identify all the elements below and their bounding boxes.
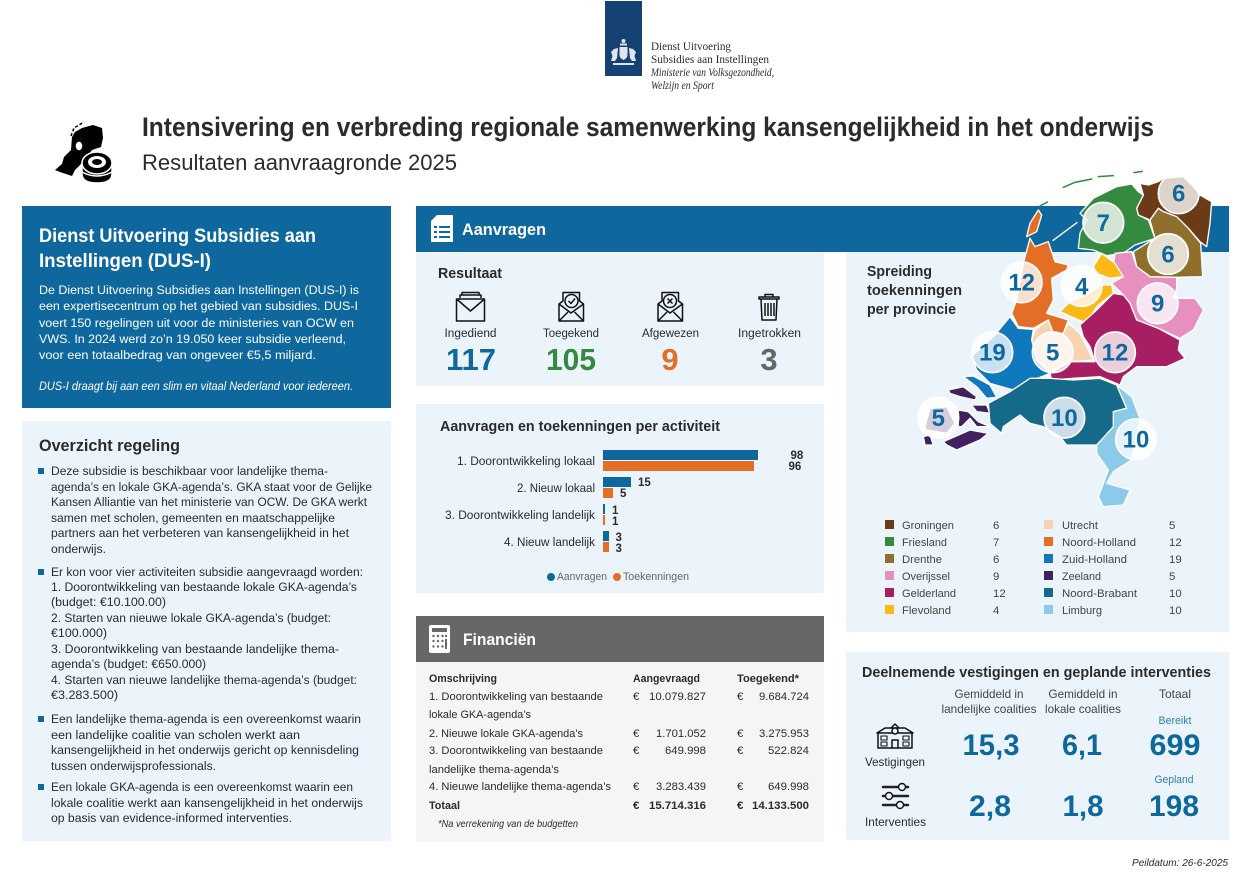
heading: Spreiding [867,264,962,318]
legend: provinces: Zeeland [1062,571,1101,583]
heading: Overzicht regeling: Overzicht regeling [39,436,180,455]
column headers: Gemiddeld in [1048,687,1118,701]
legend: activity chart [547,571,689,583]
table: budgets: € [633,800,640,812]
heading: Aanvragen: Aanvragen [462,220,546,239]
bar chart: activities: 4. Nieuw landelijk [504,535,596,549]
bubble values: 6 [1161,241,1175,268]
table: budgets: 15.714.316 [649,800,706,812]
footnote: budgets: *Na verrekening van de budgetten [438,818,578,830]
bubble values: 19 [979,340,1006,367]
legend: provinces: 12 [993,588,1006,600]
logo: Rijksoverheid [605,1,774,92]
panel: Spreiding toekenningen per provincie [846,171,1229,632]
text block: bullet 1: Deze subsidie is beschikbaar voor landelijke thema- [51,464,328,478]
province: Overijssel [1112,252,1203,338]
bar chart: activities: 1 [612,516,619,528]
legend: provinces: Zuid-Holland [1062,554,1127,566]
legend: provinces: Overijssel [902,571,950,583]
legend: provinces: 19 [1169,554,1182,566]
footnote: date: Peildatum: 26-6-2025 [1132,857,1228,869]
logo wordmark: Dienst Uitvoering [651,40,731,53]
province: Noord-Brabant [988,378,1127,445]
bubble values: 7 [1097,210,1110,237]
text block: bullet 1: Kansen Alliantie van het ministerie van OCW. De GKA werkt [51,495,368,509]
text block: bullet 4: lokale coalitie werkt aan kansengelijkheid in het onderwijs [51,796,363,810]
metric: Afgewezen: Afgewezen [642,326,699,340]
province: Drenthe [1133,208,1203,277]
table: budgets: € [737,691,744,703]
metric: Toegekend: 105 [546,342,596,377]
bar chart: activities: 3 [616,532,622,544]
legend: provinces: 9 [993,571,999,583]
logo wordmark: Ministerie van Volksgezondheid, [650,66,774,79]
column headers [942,687,1191,716]
table: budgets: Aangevraagd [633,673,700,685]
table: budgets: 14.133.500 [752,800,809,812]
table: budgets: 9.684.724 [759,691,809,703]
table: budgets: 10.079.827 [649,691,706,703]
bubble values: 4 [1075,273,1089,300]
panel: Deelnemende vestigingen en geplande interventies [846,652,1229,840]
bubble values [932,181,1185,454]
logo wordmark: Subsidies aan Instellingen [651,53,769,66]
province: Utrecht [1032,320,1093,372]
table: budgets: 649.998 [768,781,809,793]
heading: DUS-I [39,225,316,272]
table: budgets: 3.283.439 [656,781,706,793]
bubble values: 12 [1102,340,1128,367]
table: budgets: € [633,691,640,703]
metric: Ingetrokken: 3 [760,342,778,377]
metric: Ingediend: Ingediend [444,326,497,340]
bubble values: 12 [1008,270,1035,297]
row: Interventies: Gepland [1154,774,1194,786]
table: budgets: landelijke thema-agenda’s [429,764,559,776]
table: budgets: € [737,728,744,740]
bubble values: 5 [1046,340,1059,367]
text block: bullet 1: samen met scholen, gemeenten en maatschappelijke [51,511,335,525]
heading: Spreiding: per provincie [867,302,956,318]
table: budgets: 4. Nieuwe landelijke thema-agenda’s [429,781,611,793]
bubble values: 6 [1172,181,1185,208]
text block: bullet 3: een landelijke coalitie van scholen werkt aan [51,728,300,742]
legend: provinces: 5 [1169,520,1175,532]
row: Interventies: Interventies [865,815,926,829]
heading: DUS-I: Instellingen (DUS-I) [39,250,211,272]
table: budgets: Totaal [429,800,460,812]
bar chart: activities: 2. Nieuw lokaal [517,481,595,495]
metric: Afgewezen: 9 [661,342,679,377]
panel: Financiën [416,616,824,842]
map: provinces of the Netherlands [918,171,1212,507]
table: budgets: 3.275.953 [759,728,809,740]
legend: provinces [885,520,1182,617]
province: Zeeland [923,387,990,450]
table: budgets: € [737,745,744,757]
column headers: Gemiddeld in [954,687,1024,701]
column headers: landelijke coalities [942,702,1036,716]
icon: Netherlands with coins [55,122,112,183]
bubble values: 9 [1151,291,1164,318]
row: Interventies: 198 [1149,790,1199,823]
legend: provinces: Friesland [902,537,947,549]
bar chart: activities: 15 [638,477,651,489]
table: budgets: € [633,745,640,757]
heading: Resultaat: Resultaat [438,265,502,282]
province: Flevoland [1060,253,1123,323]
text block: DUS-I intro: een expertisecentrum op het gebied van subsidies. DUS-I [39,299,358,313]
province: Noord-Holland [1012,210,1068,333]
table: budgets: € [737,781,744,793]
province: Limburg [1097,385,1140,507]
table: budgets: 522.824 [768,745,809,757]
province: Zuid-Holland [963,317,1050,398]
bar chart: activities: 3. Doorontwikkeling landelijk [445,508,596,522]
legend: provinces: 6 [993,554,999,566]
bar chart: activities [445,450,804,555]
bar chart: activities: 1 [612,505,619,517]
legend: provinces: 10 [1169,588,1182,600]
metric: Toegekend: Toegekend [543,326,599,340]
text block: bullet 1: onderwijs. [51,542,106,556]
legend: provinces: 5 [1169,571,1175,583]
heading: Spreiding: Spreiding [867,264,932,280]
text block: bullet 3: kansengelijkheid in het onderwijs gericht op kennisdeling [51,743,359,757]
table: budgets: 649.998 [665,745,706,757]
text block: bullet 3: Een landelijke thema-agenda is een overeenkomst waarin [51,712,361,726]
table: budgets: Omschrijving [429,673,497,685]
legend: provinces: Utrecht [1062,520,1099,532]
icon: document [431,215,453,242]
text block: bullet 3: tussen onderwijsprofessionals. [51,759,216,773]
row: Interventies: 1,8 [1062,790,1104,823]
text block: bullet 4: Een lokale GKA-agenda is een overeenkomst waarin een [51,780,353,794]
legend: activity chart: Toekenningen [623,571,689,583]
text block: DUS-I intro [39,283,359,393]
legend: provinces: 4 [993,605,999,617]
legend: provinces: 10 [1169,605,1182,617]
row: Vestigingen: Vestigingen [865,755,925,769]
text block: DUS-I intro: De Dienst Uitvoering Subsidies aan Instellingen (DUS-I) is [39,283,359,297]
legend: provinces: Noord-Holland [1062,537,1136,549]
text block: bullet 2 [38,565,363,702]
heading: Spreiding: toekenningen [867,283,962,299]
heading: DUS-I: Dienst Uitvoering Subsidies aan [39,225,316,247]
metric: Toegekend [543,292,599,377]
bubble values: 5 [932,405,945,432]
table: budgets: Toegekend* [737,673,800,685]
text block: bullet 1: agenda’s en lokale GKA-agenda’s. GKA staat voor de Gelijke [51,480,372,494]
legend: provinces: Gelderland [902,588,956,600]
legend: activity chart: Aanvragen [557,571,607,583]
text block: bullet 4 [38,780,363,825]
bar chart: activities: 5 [620,488,627,500]
bar chart: activities: 3 [616,543,622,555]
text block: bullet 2: agenda’s (budget: €650.000) [51,657,206,671]
row: Vestigingen: Bereikt [1158,715,1192,727]
logo wordmark: Welzijn en Sport [651,79,715,92]
icon: sliders [883,784,908,808]
text block: bullet 2: 2. Starten van nieuwe lokale GKA-agenda’s (budget: [51,611,331,625]
province: Groningen [1137,177,1212,247]
column headers: lokale coalities [1045,702,1121,716]
legend: provinces: Groningen [902,520,954,532]
panel: Resultaat [416,253,824,386]
bubble values: 10 [1051,405,1078,432]
panel: Aanvragen en toekenningen per activiteit [416,404,824,593]
row: Vestigingen: 699 [1150,729,1200,762]
logo lint with crest [605,1,642,76]
text block: bullet 2: €100.000) [51,626,107,640]
row: Vestigingen: 15,3 [962,729,1020,762]
table: budgets: 1. Doorontwikkeling van bestaande [429,691,603,703]
text block: bullet 2: €3.283.500) [51,688,118,702]
icon: school building [877,724,913,748]
province: Friesland [1078,184,1155,256]
table: budgets: € [633,781,640,793]
panel: Overzicht regeling [22,421,391,841]
text block: bullet 2: 1. Doorontwikkeling van bestaande lokale GKA-agenda’s [51,580,357,594]
row: Vestigingen: 6,1 [1062,729,1102,762]
table: budgets: € [737,800,744,812]
row: Interventies: 2,8 [969,790,1011,823]
table: budgets: 2. Nieuwe lokale GKA-agenda’s [429,728,583,740]
afsluitdijk [1053,222,1077,241]
panel: Dienst Uitvoering Subsidies aan Instellingen [22,206,391,408]
heading: participation: Deelnemende vestigingen en geplande interventies [862,664,1211,681]
column headers: Totaal [1159,687,1191,701]
table: budgets: 1.701.052 [656,728,706,740]
legend: provinces: 12 [1169,537,1182,549]
bar chart: activities: 1. Doorontwikkeling lokaal [457,454,595,468]
row: Interventies [865,774,1199,829]
table: budgets: 3. Doorontwikkeling van bestaande [429,745,603,757]
heading: activity chart: Aanvragen en toekenningen per activiteit [440,418,720,435]
islands: Wadden [1040,171,1142,206]
title: Intensivering en verbreding regionale samenwerking kansengelijkheid in het onderwijs [142,112,1154,142]
bar chart: activities: 96 [788,461,801,473]
subtitle: Resultaten aanvraagronde 2025 [142,150,457,175]
legend: provinces: Drenthe [902,554,942,566]
text block: bullet 2: (budget: €10.100.00) [51,595,166,609]
text block: DUS-I intro: DUS-I draagt bij aan een slim en vitaal Nederland voor iedereen. [39,379,353,393]
table: budgets: lokale GKA-agenda’s [429,709,531,721]
legend: provinces: Noord-Brabant [1062,588,1138,600]
text block: bullet 2: Er kon voor vier activiteiten subsidie aangevraagd worden: [51,565,363,579]
text block: bullet 2: 4. Starten van nieuwe landelijke thema-agenda’s (budget: [51,673,357,687]
metric: Afgewezen [642,292,699,377]
province: Gelderland [1050,293,1185,385]
table: budgets: € [633,728,640,740]
metric: Ingetrokken: Ingetrokken [738,326,801,340]
row: Vestigingen [865,715,1200,769]
table: budgets [429,673,809,812]
legend: provinces: Flevoland [902,605,951,617]
icon: calculator [429,625,450,653]
logo wordmark [650,40,774,92]
bubble values: 10 [1123,427,1149,454]
metric: Ingediend [444,292,497,377]
metric: Ingetrokken [738,294,801,377]
value bubbles [918,173,1199,460]
text block: bullet 1: partners aan het verbeteren van kansengelijkheid in het [51,526,350,540]
text block: DUS-I intro: voor een totaalbedrag van ongeveer €5,5 miljard. [39,348,316,362]
text block: DUS-I intro: voert 150 regelingen uit voor de ministeries van OCW en [39,316,354,330]
metric: Ingediend: 117 [446,342,496,377]
text block: DUS-I intro: VWS. In 2024 werd zo’n 19.050 keer subsidie verleend, [39,332,346,346]
text block: bullet 2: 3. Doorontwikkeling van bestaande landelijke thema- [51,642,339,656]
legend: provinces: 6 [993,520,999,532]
text block: bullet 1 [38,464,372,556]
bar chart: activities: 98 [790,450,804,462]
legend: provinces: Limburg [1062,605,1102,617]
heading: Financiën: Financiën [463,630,536,649]
legend: provinces: 7 [993,537,999,549]
text block: bullet 4: op basis van evidence-informed interventies. [51,811,292,825]
header bar: Aanvragen [416,206,1229,252]
text block: bullet 3 [38,712,361,773]
